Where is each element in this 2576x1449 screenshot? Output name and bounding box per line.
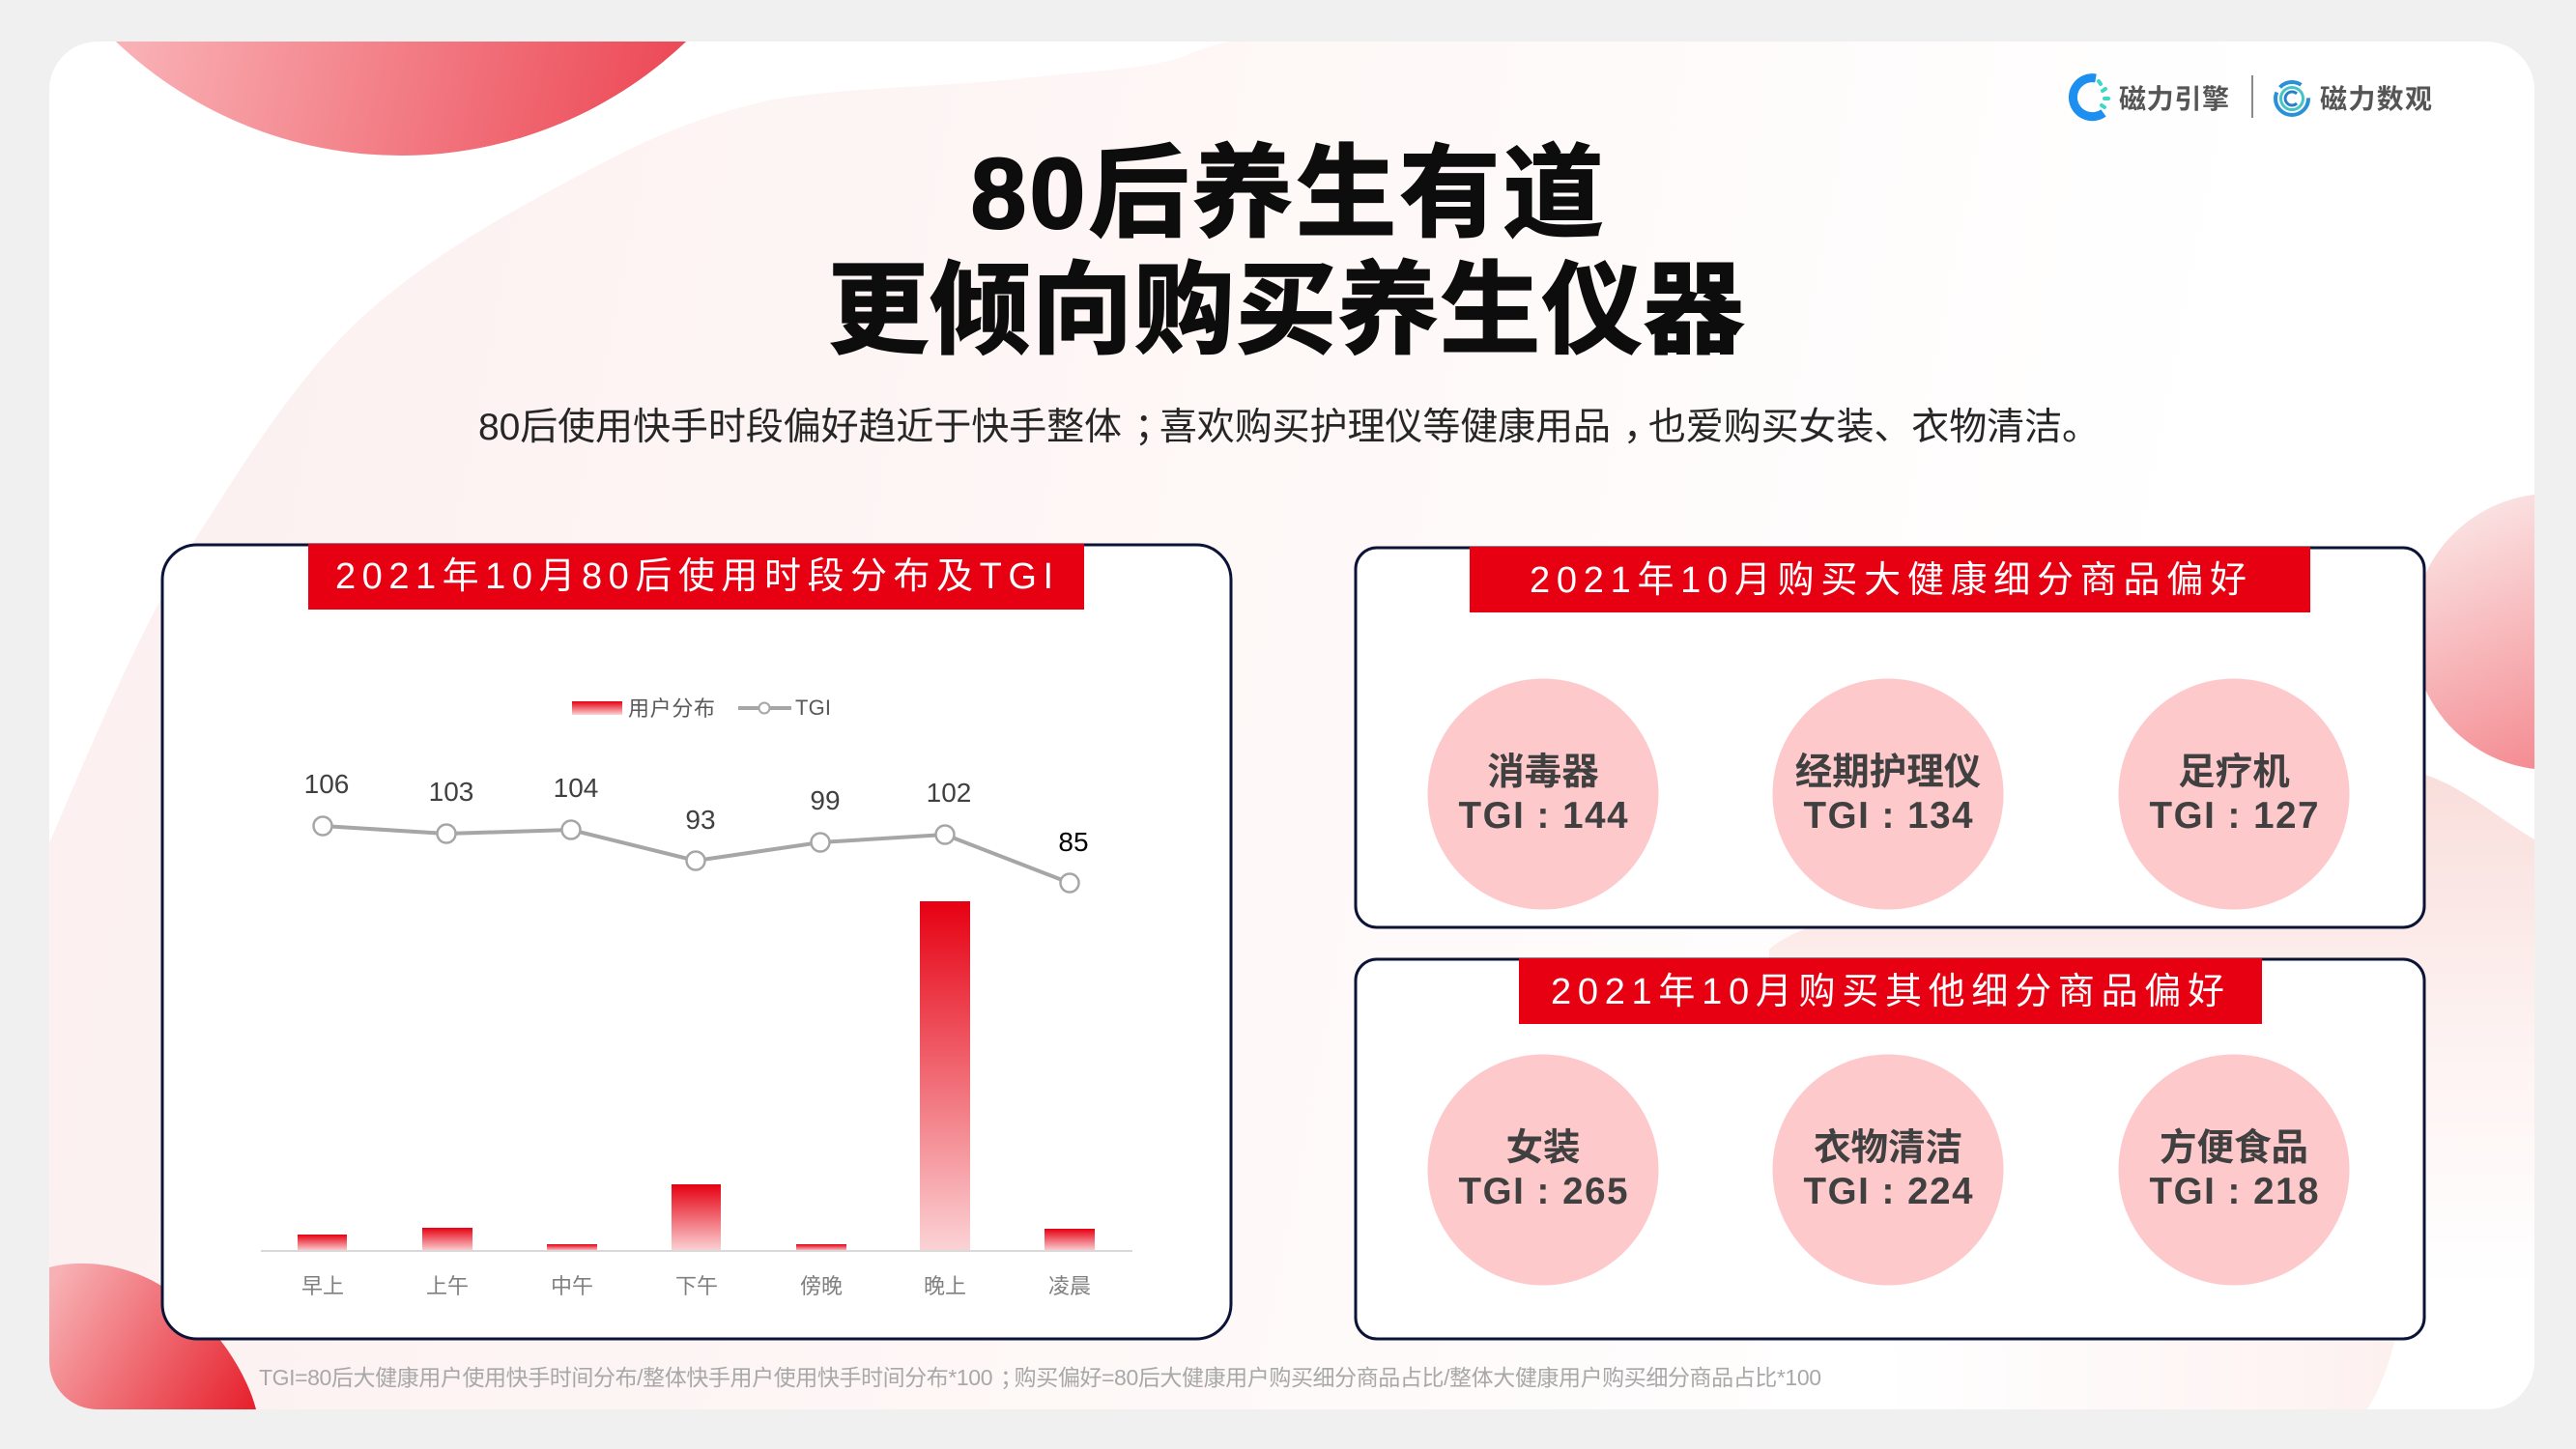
line chart values [304,769,1089,857]
line chart: TGI [313,817,1078,893]
logo divider [2251,75,2253,118]
circle: 方便食品: 方便食品 [2160,1127,2308,1169]
circle: 衣物清洁: TGI : 224 [1803,1171,1973,1212]
title [828,138,1744,367]
axis labels: 早上 [301,1274,344,1298]
line chart values: 99 [810,785,841,815]
panel heading [308,544,1084,610]
circle: 足疗机: 足疗机 [2178,752,2290,793]
circle: 消毒器: TGI : 144 [1459,795,1628,837]
line chart values: 106 [304,769,349,799]
circle: 经期护理仪: 经期护理仪 [1795,752,1981,793]
panel heading [1470,547,2310,612]
line chart values: 102 [927,778,971,808]
logo text: 磁力引擎: 磁力引擎 [2119,84,2229,114]
circle: 女装: 女装 [1505,1127,1581,1169]
circle: 足疗机 [2118,678,2350,910]
legend: TGI [795,696,831,720]
axis labels: 上午 [426,1274,469,1298]
circle: 方便食品 [2118,1055,2350,1285]
panel heading: 2021年10月购买大健康细分商品偏好 [1530,560,2247,601]
logos [2073,75,2432,118]
circle: 女装 [1428,1055,1658,1285]
circle: 经期护理仪 [1772,678,2004,910]
title line 2: 更倾向购买养生仪器 [828,255,1744,367]
circle: 衣物清洁 [1772,1055,2004,1285]
bar chart: user distribution [298,901,1095,1251]
line chart values: 93 [685,805,716,835]
circle: 经期护理仪: TGI : 134 [1803,795,1973,837]
axis labels: 傍晚 [800,1274,843,1298]
logo text: 磁力数观: 磁力数观 [2320,84,2432,114]
circle: 足疗机: TGI : 127 [2149,795,2319,837]
title line 1: 80后养生有道 [970,138,1604,250]
circle: 衣物清洁: 衣物清洁 [1814,1127,1962,1169]
panel heading [1519,958,2262,1024]
line chart values: 85 [1058,827,1089,857]
line chart values: 103 [429,777,473,807]
circle: 消毒器 [1428,678,1658,910]
panel: other product preference [1356,958,2424,1339]
footnote: TGI=80后大健康用户使用快手时间分布/整体快手用户使用快手时间分布*100 ；购买偏好=80后大健康用户购买细分商品占比/整体大健康用户购买细分商品占比*100 [259,1365,1821,1390]
panel heading: 2021年10月购买其他细分商品偏好 [1551,972,2224,1012]
axis labels: 凌晨 [1048,1274,1091,1298]
circle: 女装: TGI : 265 [1459,1171,1627,1212]
circle: 消毒器: 消毒器 [1487,752,1599,793]
legend [572,696,831,721]
axis labels [301,1274,1091,1298]
axis labels: 中午 [551,1274,593,1298]
line chart values: 104 [554,773,598,803]
axis labels: 下午 [675,1274,718,1298]
subtitle: 80后使用快手时段偏好趋近于快手整体 ；喜欢购买护理仪等健康用品 ，也爱购买女装、衣物清洁。 [478,407,2100,448]
axis [261,1250,1132,1252]
panel: health product preference [1356,547,2424,927]
panel heading: 2021年10月80后使用时段分布及TGI [335,556,1053,597]
icon: magnetic data logo [2275,82,2308,115]
axis labels: 晚上 [924,1274,966,1298]
panel: usage time distribution and TGI [162,544,1231,1339]
icon: magnetic engine logo [2073,78,2108,117]
legend: 用户分布 [628,696,715,721]
circle: 方便食品: TGI : 218 [2149,1171,2319,1212]
